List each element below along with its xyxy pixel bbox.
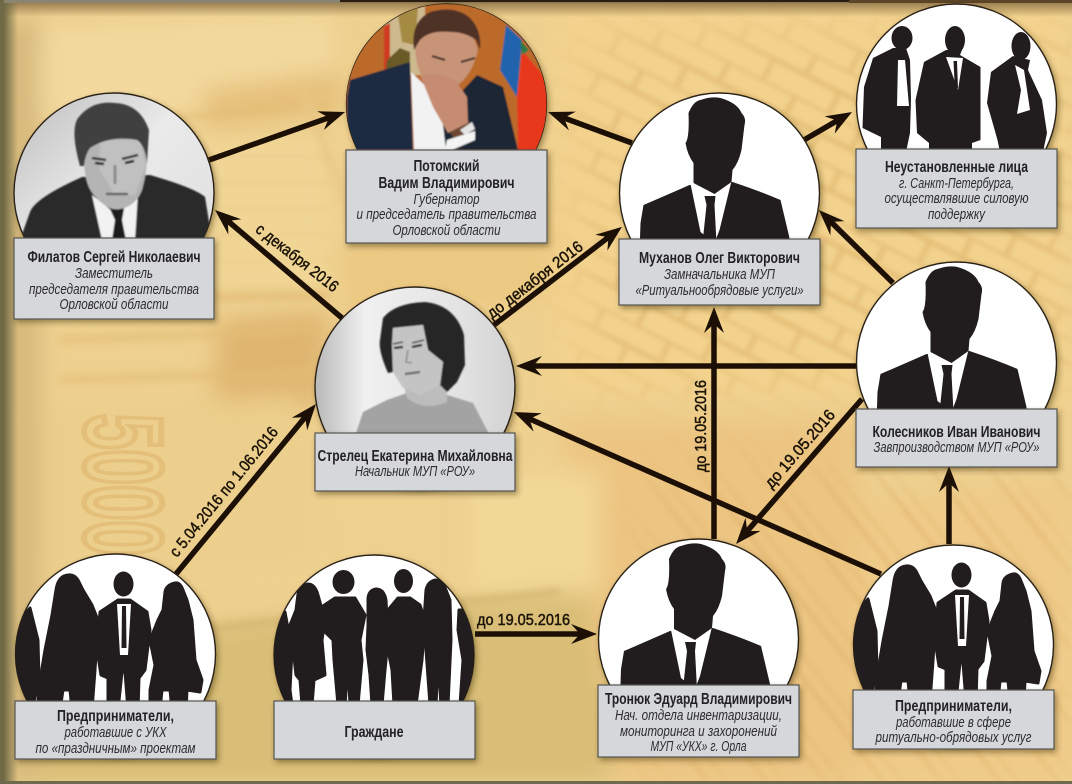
- role: Предприниматели (УКХ): работавшие с УКХ: [64, 725, 168, 741]
- role: Предприниматели (УКХ): [36, 725, 196, 757]
- person: Филатов: [14, 93, 214, 319]
- portrait circle: Колесников: [856, 262, 1056, 462]
- label box: Муханов: [619, 239, 820, 305]
- person: Муханов: [619, 93, 820, 305]
- person: Колесников: [856, 262, 1057, 467]
- name: Предприниматели (УКХ): Предприниматели,: [57, 708, 174, 725]
- name: Потомский: Вадим Владимирович: [378, 175, 514, 192]
- arrow label: с 5.04.2016 по 1.06.2016: с 5.04.2016 по 1.06.2016: [167, 424, 282, 561]
- arrow: Предприниматели ритуальных услуг to Колесников: [946, 476, 952, 544]
- arrow: Колесников to Тронюк: [743, 399, 862, 536]
- role: Предприниматели (ритуальные): работавшие в сфере: [895, 715, 1011, 731]
- role: Неустановленные лица: г. Санкт-Петербурга,: [899, 176, 1014, 192]
- portrait circle: Неустановленные лица: [856, 4, 1056, 204]
- role: Тронюк: мониторинга и захоронений: [620, 724, 777, 740]
- arrow: Предприниматели УКХ to Стрелец: [176, 412, 310, 574]
- role: Предприниматели (ритуальные): [875, 715, 1032, 746]
- name: Граждане: Граждане: [344, 724, 404, 741]
- label box: Граждане: [274, 701, 475, 759]
- person: Тронюк: [598, 539, 799, 757]
- name: Тронюк: Тронюк Эдуард Владимирович: [605, 691, 792, 708]
- portrait circle: Предприниматели (УКХ): [16, 554, 216, 754]
- arrow: Стрелец to Филатов: [223, 216, 342, 318]
- name: Муханов: Муханов Олег Викторович: [639, 250, 800, 267]
- silhouette: Колесников: [876, 266, 1026, 422]
- silhouette: Тронюк: [620, 543, 770, 699]
- portrait circle: Филатов: [14, 93, 214, 293]
- portrait circle: Стрелец: [315, 287, 515, 487]
- arrow: Муханов to Неустановленные лица: [804, 117, 843, 140]
- arrow label: до 19.05.2016 vertical: до 19.05.2016: [693, 380, 710, 472]
- arrow label: до 19.05.2016 diagonal: до 19.05.2016: [762, 407, 839, 492]
- portrait circle: Муханов: [620, 93, 820, 293]
- role: Филатов: [29, 266, 199, 313]
- group: Неустановленные лица: [856, 4, 1057, 228]
- arrow: Филатов to Потомский: [209, 115, 336, 160]
- role: Предприниматели (УКХ): по «праздничным» проектам: [36, 741, 196, 757]
- label box: Филатов: [14, 238, 214, 319]
- arrow label: до 19.05.2016 horizontal: до 19.05.2016: [477, 612, 570, 629]
- arrow: Стрелец to Муханов: [494, 233, 614, 325]
- arrow: Граждане to Тронюк: [475, 631, 587, 637]
- name: Неустановленные лица: Неустановленные лица: [885, 159, 1028, 176]
- role: Неустановленные лица: осуществлявшие силовую: [884, 191, 1029, 207]
- group: Предприниматели, ритуально-обрядовые услуги: [852, 545, 1054, 749]
- label box: Потомский: [346, 150, 547, 243]
- label box: Тронюк: [598, 685, 799, 757]
- label box: Неустановленные лица: [856, 149, 1057, 228]
- role: Филатов: председателя правительства: [29, 282, 199, 298]
- role: Филатов: Орловской области: [60, 297, 168, 313]
- silhouette: Муханов: [640, 97, 790, 253]
- role: Муханов: «Ритуальнообрядовые услуги»: [636, 283, 804, 299]
- photo: Потомский: [346, 4, 547, 154]
- name: Потомский: Потомский: [414, 158, 480, 175]
- person: Потомский: [346, 4, 547, 243]
- arrow: Предприниматели ритуальных услуг to Стрелец: [523, 416, 881, 574]
- role: Неустановленные лица: поддержку: [928, 207, 986, 223]
- label box: Стрелец: [315, 433, 515, 491]
- photo: Стрелец: [355, 302, 490, 436]
- role: Потомский: и председатель правительства: [356, 207, 536, 223]
- label box: Предприниматели (ритуальные): [853, 690, 1054, 749]
- photo: Филатов: [20, 103, 212, 240]
- role: Муханов: Замначальника МУП: [664, 267, 775, 283]
- silhouettes: business people right: [852, 562, 1040, 701]
- group: Граждане: [272, 555, 477, 759]
- portrait circle: Потомский: [346, 4, 546, 204]
- role: Стрелец: Начальник МУП «РОУ»: [355, 464, 475, 480]
- name: Стрелец: Стрелец Екатерина Михайловна: [318, 448, 513, 465]
- label box: Колесников: [856, 409, 1057, 467]
- arrow: Муханов to Потомский: [557, 116, 632, 143]
- role: Тронюк: [615, 708, 782, 755]
- label box: Предприниматели (УКХ): [15, 701, 216, 759]
- silhouettes: three men: [862, 26, 1047, 152]
- name: Предприниматели (ритуальные): Предприниматели,: [895, 698, 1012, 715]
- arrow: Тронюк to Муханов: [711, 317, 717, 539]
- role: Потомский: Губернатор: [414, 192, 480, 208]
- portrait circle: Граждане: [274, 555, 474, 755]
- group: Предприниматели, УКХ: [14, 554, 216, 759]
- role: Неустановленные лица: [884, 176, 1029, 223]
- arrow: Колесников to Муханов: [826, 217, 893, 283]
- silhouettes: citizens: [272, 569, 477, 705]
- arrow: Колесников to Стрелец: [526, 363, 856, 369]
- role: Потомский: Орловской области: [392, 223, 500, 239]
- portrait circle: Предприниматели (ритуальные): [854, 545, 1054, 745]
- role: Филатов: Заместитель: [75, 266, 153, 282]
- person: Стрелец: [315, 287, 515, 491]
- role: Предприниматели (ритуальные): ритуально-обрядовых услуг: [875, 730, 1032, 746]
- name: Потомский: [378, 158, 514, 192]
- background banknote numerals: 5000: [61, 414, 184, 556]
- portrait circle: Тронюк: [598, 539, 798, 739]
- role: Муханов: [636, 267, 804, 299]
- role: Потомский: [356, 192, 536, 239]
- role: Тронюк: Нач. отдела инвентаризации,: [615, 708, 782, 724]
- role: Тронюк: МУП «УКХ» г. Орла: [650, 739, 746, 755]
- silhouettes: business people left: [14, 572, 202, 710]
- arrow label: с декабря 2016: с декабря 2016: [252, 221, 341, 296]
- arrow label: до декабря 2016: до декабря 2016: [484, 238, 587, 322]
- name: Филатов: Филатов Сергей Николаевич: [28, 249, 200, 266]
